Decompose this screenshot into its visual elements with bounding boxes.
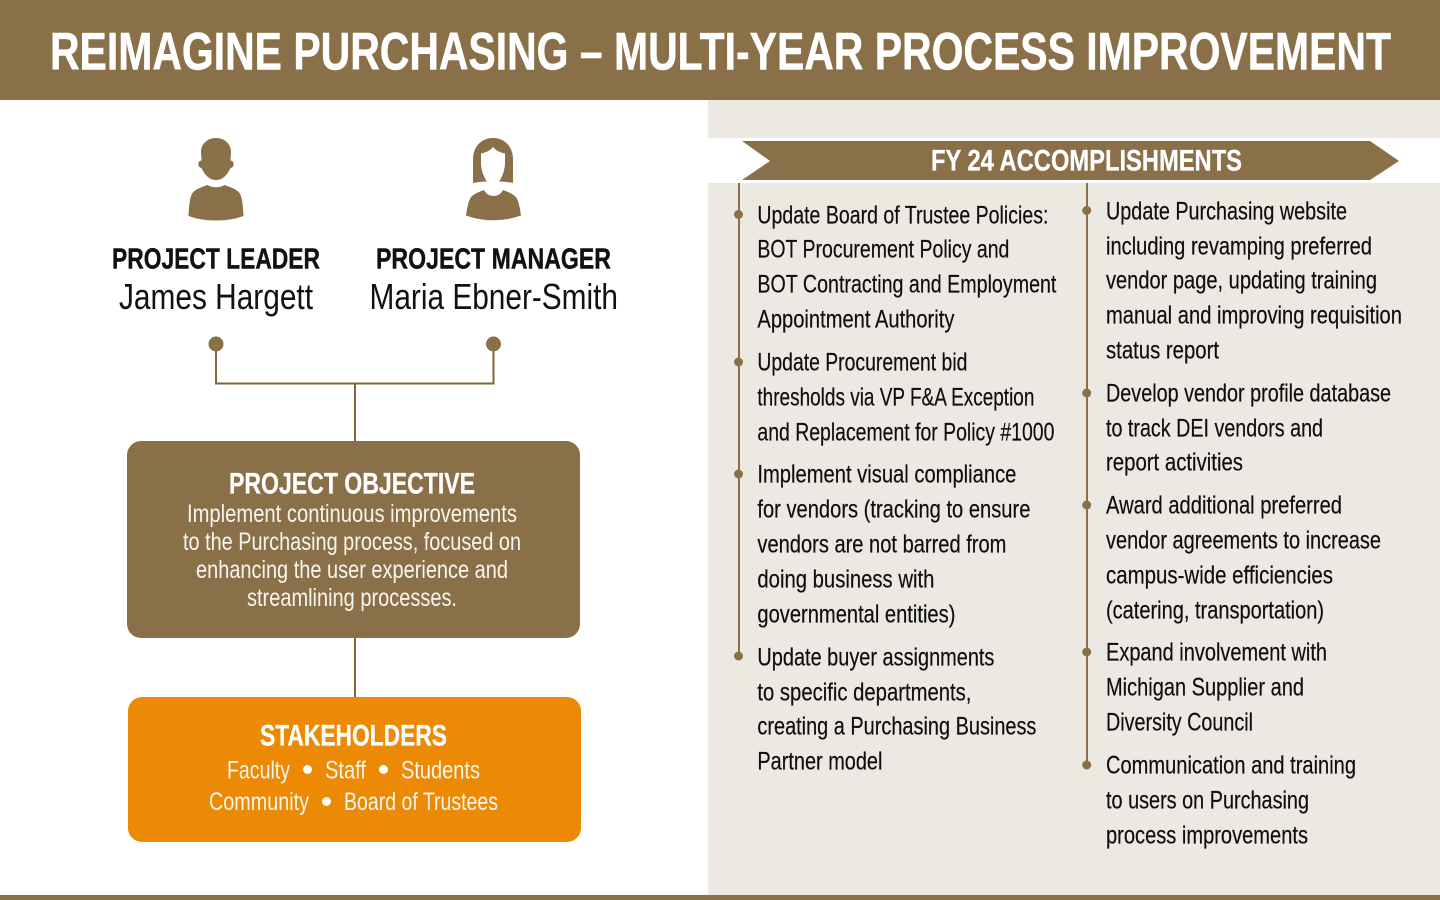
accomplishment: bid thresholds: and Replacement for Policy #1000 [757, 419, 1054, 447]
panel: project objective: Implement continuous improvements [187, 500, 517, 528]
accomplishment: buyer assignments: creating a Purchasing Business [757, 713, 1036, 741]
project manager label: PROJECT MANAGER [376, 244, 611, 276]
panel: project objective [127, 441, 580, 638]
panel: stakeholders: Board of Trustees [344, 788, 498, 816]
panel: project objective: to the Purchasing process, focused on [183, 528, 521, 556]
accomplishment: supplier council: Diversity Council [1106, 709, 1253, 737]
icon: project leader [188, 138, 244, 220]
accomplishment: supplier council: Michigan Supplier and [1106, 674, 1304, 702]
accomplishment: vendor database: report activities [1106, 449, 1243, 477]
accomplishment: purchasing website: vendor page, updating training [1106, 267, 1377, 295]
accomplishment: vendor agreements: campus-wide efficiencies [1106, 562, 1333, 590]
accomplishment: visual compliance: for vendors (tracking to ensure [757, 496, 1030, 524]
accomplishment: supplier council: Expand involvement with [1106, 639, 1327, 667]
accomplishment: purchasing website: status report [1106, 337, 1219, 365]
accomplishment: bid thresholds [757, 349, 1054, 447]
accomplishment: bid thresholds: Update Procurement bid [757, 349, 967, 377]
accomplishment: visual compliance: doing business with [757, 566, 934, 594]
accomplishment: board policies: BOT Procurement Policy and [757, 236, 1009, 264]
accomplishment: vendor agreements: (catering, transportation) [1106, 597, 1324, 625]
timeline: left column [734, 183, 743, 660]
right panel background [708, 100, 1440, 895]
panel: project objective: PROJECT OBJECTIVE [229, 468, 475, 500]
connector: objective to stakeholders [354, 638, 356, 697]
accomplishment: purchasing website: Update Purchasing website [1106, 198, 1347, 226]
accomplishment: visual compliance [757, 461, 1030, 629]
accomplishment: buyer assignments: Update buyer assignments [757, 644, 994, 672]
project manager label [370, 244, 618, 317]
panel: stakeholders: Students [401, 756, 480, 784]
panel: stakeholders: Staff [325, 756, 366, 784]
panel: project objective: enhancing the user experience and [196, 556, 508, 584]
project manager label: Maria Ebner-Smith [370, 276, 618, 317]
accomplishment: communication and training: Communication and training [1106, 752, 1356, 780]
accomplishment: board policies: BOT Contracting and Employment [757, 271, 1056, 299]
panel: project objective: streamlining processes. [247, 584, 457, 612]
accomplishment: visual compliance: vendors are not barred from [757, 531, 1006, 559]
bottom band [0, 895, 1440, 900]
accomplishment: vendor database [1106, 380, 1391, 477]
accomplishment: buyer assignments: to specific departments, [757, 679, 971, 707]
accomplishment: purchasing website: including revamping preferred [1106, 233, 1372, 261]
accomplishment: purchasing website [1106, 198, 1402, 365]
title banner [0, 0, 1440, 100]
accomplishment: board policies [757, 202, 1056, 334]
accomplishment: buyer assignments: Partner model [757, 748, 882, 776]
heading: FY 24 accomplishments: FY 24 ACCOMPLISHMENTS [931, 145, 1242, 178]
project leader label: PROJECT LEADER [112, 244, 320, 276]
heading: FY 24 accomplishments [742, 141, 1399, 180]
accomplishment: board policies: Appointment Authority [757, 306, 955, 334]
accomplishment: board policies: Update Board of Trustee Policies: [757, 202, 1048, 230]
accomplishment: buyer assignments [757, 644, 1036, 776]
accomplishment: communication and training: to users on Purchasing [1106, 787, 1309, 815]
accomplishment: vendor database: to track DEI vendors and [1106, 415, 1323, 443]
timeline: right column [1082, 183, 1091, 770]
icon: project manager [466, 138, 521, 220]
project leader label [112, 244, 320, 317]
panel: stakeholders: Community [209, 788, 309, 816]
connector: people to objective [208, 336, 501, 441]
accomplishment: vendor agreements [1106, 492, 1381, 625]
accomplishment: visual compliance: governmental entities) [757, 601, 955, 629]
accomplishment: visual compliance: Implement visual compliance [757, 461, 1016, 489]
accomplishment: vendor agreements: Award additional preferred [1106, 492, 1342, 520]
panel: stakeholders: STAKEHOLDERS [260, 720, 447, 753]
accomplishment: communication and training: process improvements [1106, 822, 1308, 850]
accomplishment: supplier council [1106, 639, 1327, 737]
accomplishment: bid thresholds: thresholds via VP F&A Exception [757, 384, 1034, 412]
panel: stakeholders: Faculty [227, 756, 290, 784]
project leader label: James Hargett [119, 276, 313, 317]
panel: stakeholders [128, 697, 581, 842]
accomplishment: communication and training [1106, 752, 1356, 850]
